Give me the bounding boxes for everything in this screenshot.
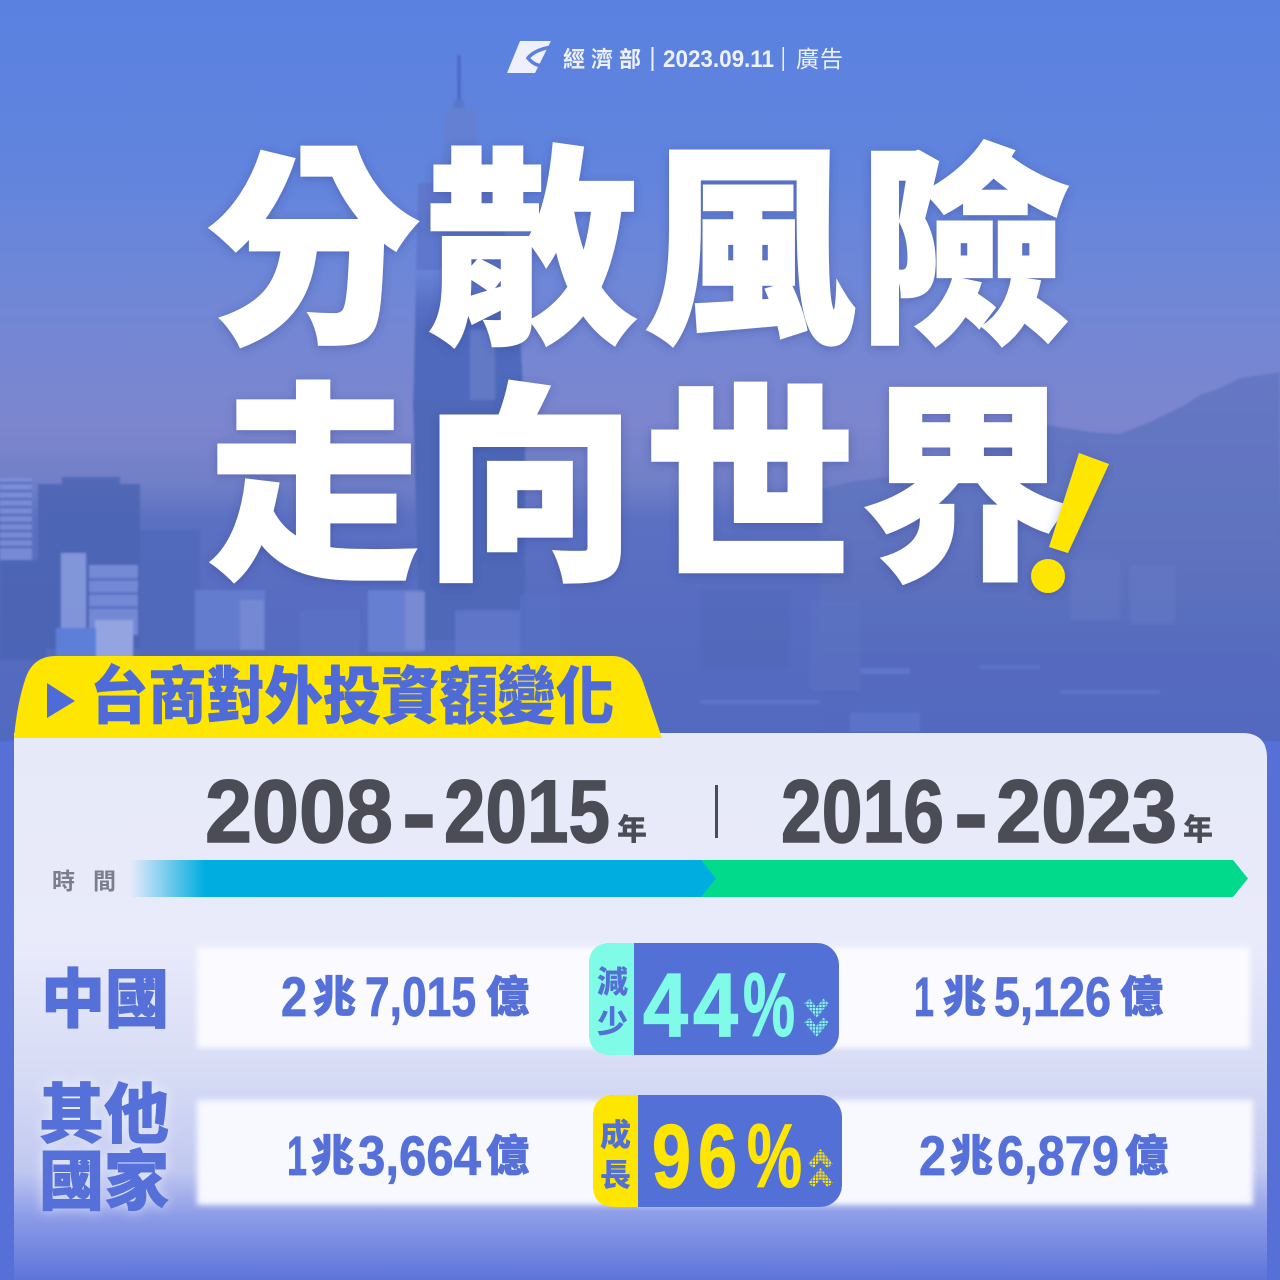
percent value: 6 xyxy=(698,1107,737,1207)
row background xyxy=(197,1100,1253,1205)
row label xyxy=(39,1078,169,1218)
period 2: 2016 xyxy=(781,761,944,861)
value 2008-2015: 1 xyxy=(287,1124,307,1187)
value 2016-2023: 6,879 xyxy=(997,1124,1119,1187)
value 2016-2023: 2 xyxy=(919,1124,946,1187)
left buildings xyxy=(0,477,560,660)
percent value xyxy=(652,1107,802,1207)
row: China xyxy=(41,947,1250,1048)
percent value xyxy=(643,956,795,1056)
title line 2: 走向世界 xyxy=(208,370,1073,607)
time label: 時間 xyxy=(52,868,134,894)
value 2008-2015 xyxy=(287,1124,529,1187)
value 2016-2023: 5,126 xyxy=(994,965,1111,1028)
value 2016-2023 xyxy=(914,965,1163,1028)
value 2008-2015 xyxy=(281,965,529,1028)
value 2016-2023: 億 xyxy=(1120,974,1163,1022)
badge: decrease 44%: 少 xyxy=(597,1005,628,1040)
value 2008-2015: 億 xyxy=(486,1133,529,1181)
period 1: 2015 xyxy=(444,761,610,861)
row label: 其他 xyxy=(39,1078,169,1151)
value 2016-2023 xyxy=(919,1124,1168,1187)
value 2008-2015: 3,664 xyxy=(358,1124,481,1187)
Taipei 101 xyxy=(413,55,525,640)
row background xyxy=(197,947,1250,1048)
badge: growth 96% xyxy=(593,1095,842,1207)
period 2 xyxy=(781,757,1177,869)
badge label: 成 xyxy=(600,1118,631,1153)
badge: decrease 44% xyxy=(589,943,839,1056)
ministry name: 經濟部 xyxy=(563,47,647,72)
right district xyxy=(700,560,1175,732)
period 2: 2023 xyxy=(996,761,1177,861)
period 2: - xyxy=(954,757,988,869)
icon: double down chevrons xyxy=(807,1001,826,1032)
panel background xyxy=(14,733,1267,1280)
value 2008-2015: 2 xyxy=(281,965,307,1028)
value 2008-2015: 兆 xyxy=(313,974,356,1022)
panel: investment change xyxy=(14,656,1267,1280)
value 2008-2015: 兆 xyxy=(311,1133,354,1181)
value 2016-2023: 1 xyxy=(914,965,934,1028)
yellow section tab xyxy=(14,656,662,738)
title: main heading xyxy=(208,133,1073,607)
percent value: 9 xyxy=(652,1107,691,1207)
value 2008-2015: 億 xyxy=(486,974,529,1022)
percent value: 4 xyxy=(643,956,688,1056)
period 1: 2008 xyxy=(205,761,393,861)
timeline arrow bar xyxy=(52,860,1248,897)
period 1 xyxy=(205,757,610,869)
period 1: - xyxy=(402,757,436,869)
badge label: 減 xyxy=(597,965,628,1000)
row label: 中國 xyxy=(41,964,169,1036)
section heading: 台商對外投資額變化 xyxy=(90,662,614,732)
icon: ministry logo xyxy=(507,41,551,73)
row label: 國家 xyxy=(39,1145,169,1218)
percent value: 4 xyxy=(693,956,738,1056)
header: ministry logo, date and ad label xyxy=(507,41,844,73)
icon: yellow exclamation mark xyxy=(1031,453,1109,593)
value 2016-2023: 億 xyxy=(1125,1133,1168,1181)
period headings: 年 xyxy=(1183,814,1213,847)
value 2008-2015: 7,015 xyxy=(365,965,476,1028)
icon: play triangle xyxy=(47,683,75,718)
date: 2023.09.11 xyxy=(663,46,774,73)
ad label: 廣告 xyxy=(796,46,844,72)
row: other countries xyxy=(39,1078,1253,1218)
period headings: 年 xyxy=(617,814,647,847)
period headings xyxy=(205,757,1213,869)
percent value: % xyxy=(743,956,795,1056)
title line 1: 分散風險 xyxy=(208,133,1072,370)
icon: double up chevrons xyxy=(811,1154,830,1185)
value 2016-2023: 兆 xyxy=(943,974,986,1022)
far mountains xyxy=(820,372,1280,738)
badge: growth 96%: 長 xyxy=(600,1158,631,1193)
percent value: % xyxy=(747,1107,802,1207)
value 2016-2023: 兆 xyxy=(950,1133,993,1181)
